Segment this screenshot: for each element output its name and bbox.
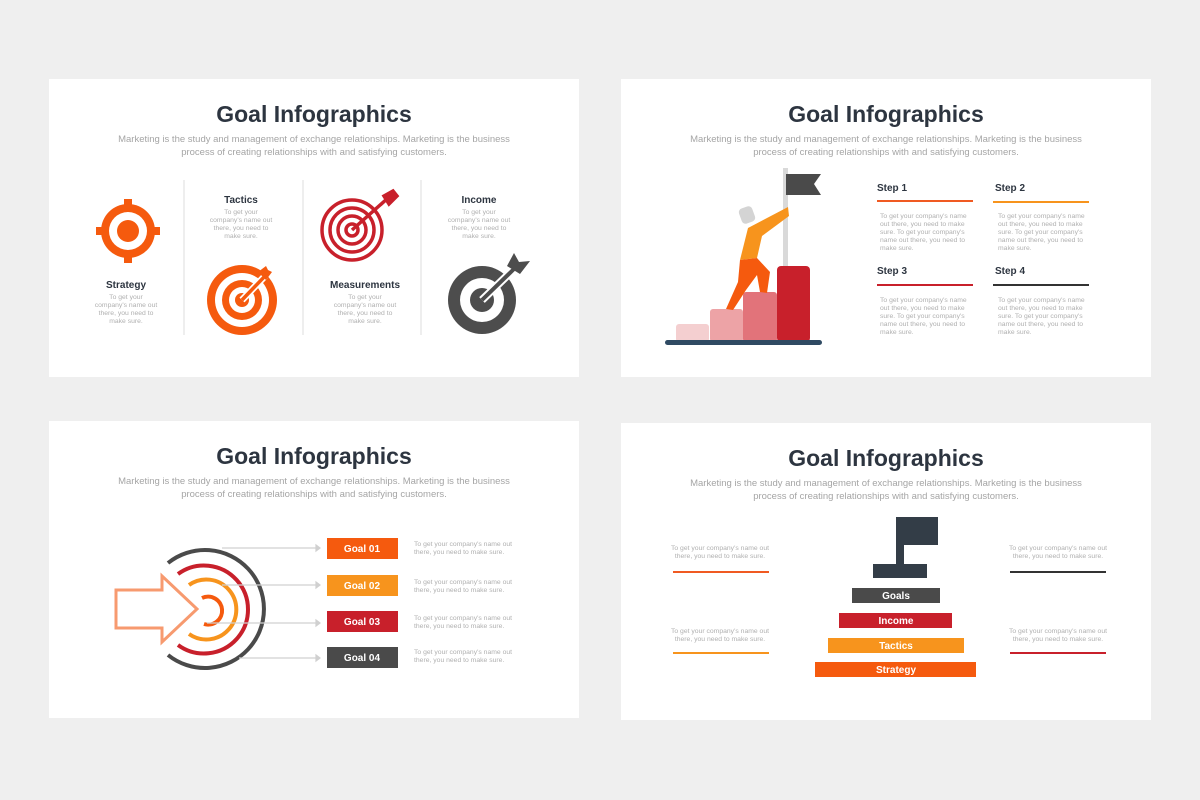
target arcs with arrow bbox=[116, 550, 264, 668]
step 2 bbox=[993, 183, 1089, 252]
step 3 bbox=[877, 266, 973, 336]
pyramid bars: Strategy bbox=[876, 665, 916, 676]
text: income: make sure. bbox=[462, 233, 496, 240]
subtitle: process of creating relationships with and satisfying customers. bbox=[753, 147, 1019, 158]
step 2: Step 2 bbox=[995, 183, 1025, 194]
icon: income dart target bbox=[448, 253, 530, 334]
side text: left bottom: To get your company's name out bbox=[671, 628, 769, 635]
step 4: out there, you need to make bbox=[998, 305, 1083, 312]
step 1 bbox=[877, 183, 973, 252]
goal 02: there, you need to make sure. bbox=[414, 587, 504, 594]
side text: left top: To get your company's name out bbox=[671, 545, 769, 552]
step 2: sure. To get your company's bbox=[998, 229, 1083, 236]
text: tactics: make sure. bbox=[224, 233, 258, 240]
title: Goal Infographics bbox=[216, 443, 412, 469]
step 4: Step 4 bbox=[995, 266, 1025, 277]
panel: top-right steps slide bbox=[621, 79, 1151, 377]
goal 02: Goal 02 bbox=[344, 581, 380, 592]
text: income: there, you need to bbox=[452, 225, 507, 232]
text: strategy bbox=[95, 280, 157, 325]
side text: left bottom bbox=[671, 628, 769, 654]
connector arrows bbox=[207, 545, 320, 661]
subtitle: Marketing is the study and management of exchange relationships. Marketing is the business bbox=[690, 134, 1082, 145]
goal 01: To get your company's name out bbox=[414, 541, 512, 548]
subtitle bbox=[690, 134, 1082, 158]
step 4: make sure. bbox=[998, 329, 1032, 336]
goal 02: To get your company's name out bbox=[414, 579, 512, 586]
side text: right top: To get your company's name out bbox=[1009, 545, 1107, 552]
pyramid bars: Goals bbox=[882, 591, 910, 602]
subtitle bbox=[690, 478, 1082, 502]
text: tactics: company's name out bbox=[210, 217, 272, 224]
text: tactics bbox=[210, 195, 272, 240]
step 3: sure. To get your company's bbox=[880, 313, 965, 320]
goal 03: there, you need to make sure. bbox=[414, 623, 504, 630]
subtitle bbox=[118, 134, 510, 158]
icon: strategy crosshair bbox=[96, 199, 160, 263]
step 4: To get your company's name bbox=[998, 297, 1085, 304]
text: strategy: make sure. bbox=[109, 318, 143, 325]
text: strategy: company's name out bbox=[95, 302, 157, 309]
side text: right bottom bbox=[1009, 628, 1107, 654]
goal 03: Goal 03 bbox=[344, 617, 380, 628]
text: measurements: there, you need to bbox=[338, 310, 393, 317]
goal 04 bbox=[327, 647, 512, 668]
panel: top-left icons slide bbox=[49, 79, 579, 377]
goal 02 bbox=[327, 575, 512, 596]
side text: right top: there, you need to make sure. bbox=[1013, 553, 1103, 560]
goal 03: To get your company's name out bbox=[414, 615, 512, 622]
step 1: sure. To get your company's bbox=[880, 229, 965, 236]
text: measurements: company's name out bbox=[334, 302, 396, 309]
goal 03 bbox=[327, 611, 512, 632]
step 2: out there, you need to make bbox=[998, 221, 1083, 228]
step 3: To get your company's name bbox=[880, 297, 967, 304]
goal 04: there, you need to make sure. bbox=[414, 657, 504, 664]
illustration: climber with flag on bars bbox=[665, 168, 822, 345]
text: tactics: To get your bbox=[224, 209, 259, 216]
goal 01: Goal 01 bbox=[344, 544, 380, 555]
text: measurements: Measurements bbox=[330, 280, 400, 291]
panel: bottom-left goals slide bbox=[49, 421, 579, 718]
side text: right bottom: there, you need to make sure. bbox=[1013, 636, 1103, 643]
goal 01: there, you need to make sure. bbox=[414, 549, 504, 556]
step 2: make sure. bbox=[998, 245, 1032, 252]
icon: flag on base bbox=[873, 517, 938, 578]
side text: left bottom: there, you need to make sure. bbox=[675, 636, 765, 643]
panel: bottom-right pyramid slide bbox=[621, 423, 1151, 720]
step 3: name out there, you need to bbox=[880, 321, 965, 328]
step 4: sure. To get your company's bbox=[998, 313, 1083, 320]
step 3: Step 3 bbox=[877, 266, 907, 277]
goal 04: Goal 04 bbox=[344, 653, 380, 664]
text: income bbox=[448, 195, 510, 240]
text: measurements: To get your bbox=[348, 294, 383, 301]
step 3: make sure. bbox=[880, 329, 914, 336]
text: strategy: To get your bbox=[109, 294, 144, 301]
step 1: make sure. bbox=[880, 245, 914, 252]
step 4: name out there, you need to bbox=[998, 321, 1083, 328]
step 1: Step 1 bbox=[877, 183, 907, 194]
icon: tactics target bbox=[207, 265, 277, 335]
step 2: To get your company's name bbox=[998, 213, 1085, 220]
step 3: out there, you need to make bbox=[880, 305, 965, 312]
pyramid bars: Tactics bbox=[879, 641, 913, 652]
text: measurements bbox=[330, 280, 400, 325]
text: strategy: Strategy bbox=[106, 280, 146, 291]
text: measurements: make sure. bbox=[348, 318, 382, 325]
side text: left top bbox=[671, 545, 769, 573]
subtitle: Marketing is the study and management of exchange relationships. Marketing is the business bbox=[118, 134, 510, 145]
text: income: company's name out bbox=[448, 217, 510, 224]
side text: right bottom: To get your company's name out bbox=[1009, 628, 1107, 635]
pyramid bars bbox=[815, 588, 976, 677]
subtitle: process of creating relationships with and satisfying customers. bbox=[753, 491, 1019, 502]
text: tactics: there, you need to bbox=[214, 225, 269, 232]
text: tactics: Tactics bbox=[224, 195, 258, 206]
subtitle: Marketing is the study and management of exchange relationships. Marketing is the business bbox=[690, 478, 1082, 489]
step 1: name out there, you need to bbox=[880, 237, 965, 244]
step 2: name out there, you need to bbox=[998, 237, 1083, 244]
subtitle bbox=[118, 476, 510, 500]
goal 04: To get your company's name out bbox=[414, 649, 512, 656]
side text: right top bbox=[1009, 545, 1107, 573]
title: Goal Infographics bbox=[788, 445, 984, 471]
goal 01 bbox=[327, 538, 512, 559]
subtitle: process of creating relationships with and satisfying customers. bbox=[181, 489, 447, 500]
text: income: To get your bbox=[462, 209, 497, 216]
step 1: out there, you need to make bbox=[880, 221, 965, 228]
pyramid bars: Income bbox=[878, 616, 914, 627]
text: income: Income bbox=[461, 195, 497, 206]
subtitle: Marketing is the study and management of exchange relationships. Marketing is the business bbox=[118, 476, 510, 487]
side text: left top: there, you need to make sure. bbox=[675, 553, 765, 560]
step 4 bbox=[993, 266, 1089, 336]
icon: measurements target bbox=[322, 191, 397, 260]
title: Goal Infographics bbox=[216, 101, 412, 127]
text: strategy: there, you need to bbox=[99, 310, 154, 317]
title: Goal Infographics bbox=[788, 101, 984, 127]
subtitle: process of creating relationships with and satisfying customers. bbox=[181, 147, 447, 158]
step 1: To get your company's name bbox=[880, 213, 967, 220]
